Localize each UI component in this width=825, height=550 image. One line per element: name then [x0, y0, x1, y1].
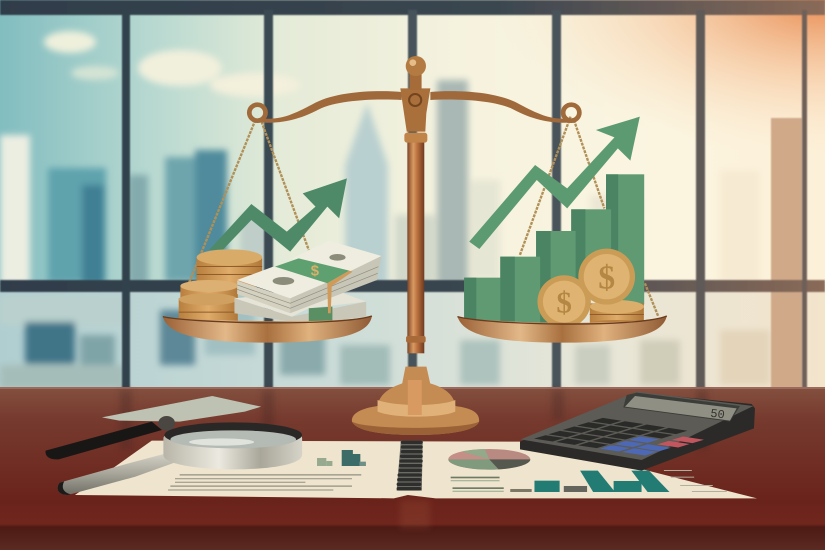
tall building column on right [771, 118, 802, 388]
background: blurred city skyline through window [0, 0, 825, 395]
scale base [352, 367, 479, 435]
report paper [75, 441, 757, 498]
finial [409, 73, 422, 90]
desk objects [45, 396, 757, 498]
left mini bar chart [317, 450, 366, 466]
cash bundles [234, 241, 381, 324]
left pan [163, 316, 372, 343]
post [407, 140, 424, 353]
right bars [464, 174, 644, 323]
left arrow [209, 178, 347, 252]
beam ring left [249, 105, 266, 121]
spiral binding [397, 441, 423, 491]
desk [0, 387, 825, 550]
far right paper lines [664, 470, 727, 492]
window frame mullions [0, 0, 825, 388]
right chains [520, 117, 658, 317]
beam [261, 91, 402, 123]
center block [400, 88, 430, 132]
calculator [520, 392, 755, 471]
coin stacks left [179, 249, 262, 322]
cash bundles: $ [311, 263, 319, 279]
right pan [457, 316, 667, 343]
calculator display [625, 396, 737, 422]
silver magnifier [58, 422, 302, 495]
calculator display: 50 [709, 407, 725, 422]
small dollar coin: $ [556, 285, 572, 320]
pie chart [448, 449, 530, 470]
small dollar coin [537, 275, 591, 328]
right arrow [469, 117, 640, 249]
beam ring right [563, 105, 579, 121]
black magnifier handle [45, 416, 175, 459]
coin stack right [590, 300, 644, 327]
calculator keys [534, 418, 718, 456]
card [102, 396, 261, 422]
left paper text lines [168, 474, 361, 491]
big dollar coin: $ [598, 260, 615, 296]
left chains [189, 120, 309, 283]
big dollar coin [578, 249, 635, 305]
right paper legends and bars [451, 471, 669, 492]
balance scale [163, 56, 667, 435]
